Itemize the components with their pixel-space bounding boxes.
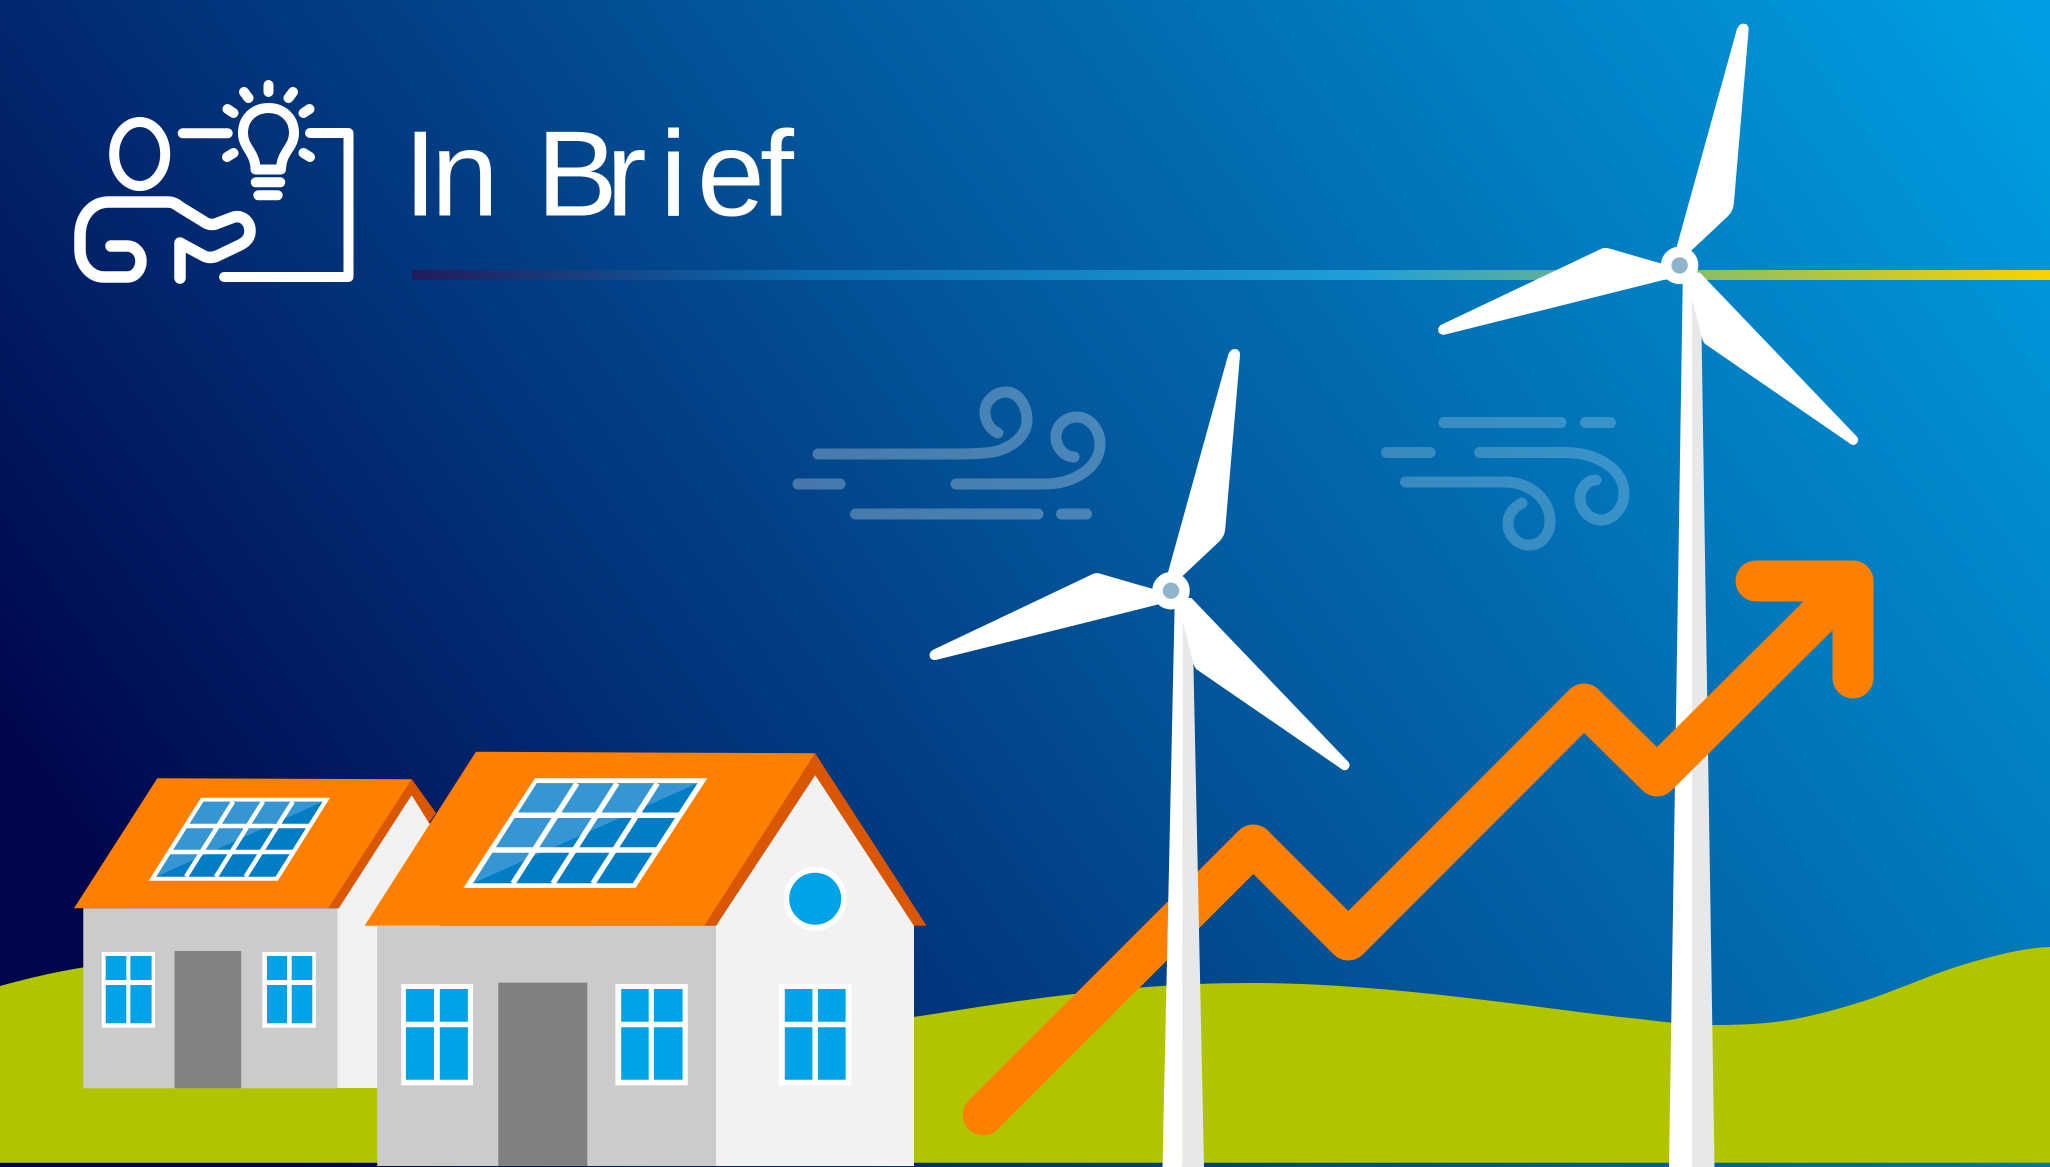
orange growth arrow: [983, 581, 1853, 1115]
left wind turbine: [930, 350, 1349, 1167]
big house left window: [401, 984, 473, 1085]
green hills: [0, 947, 2050, 1163]
right wind turbine: [1439, 24, 1857, 1167]
big house door: [498, 983, 587, 1166]
big house middle window: [615, 984, 688, 1085]
gradient rule under heading: [412, 270, 2050, 280]
title: In Brief: [403, 106, 795, 242]
small house roof edge: [328, 779, 436, 908]
big house: [365, 752, 927, 1166]
small house right window: [262, 952, 316, 1028]
right turbine blades and hub: [1439, 24, 1857, 444]
icon part: body and arm: [80, 202, 250, 278]
icon part: presentation frame: [224, 133, 348, 277]
big house front wall: [377, 926, 716, 1166]
wind swirl left: [798, 392, 1100, 514]
right turbine tower: [1669, 265, 1714, 1167]
big house solar panel: [463, 778, 707, 888]
left turbine tower: [1162, 590, 1204, 1167]
small house roof: [74, 778, 412, 908]
icon part: light rays: [227, 85, 310, 157]
icon part: bulb base: [256, 182, 280, 195]
big house roof: [365, 752, 815, 926]
small house gable wall: [337, 795, 440, 1088]
icon part: line left of bulb: [183, 128, 228, 138]
wind swirl right: [1386, 422, 1624, 545]
icon part: lightbulb: [243, 108, 294, 170]
small house: [74, 778, 440, 1088]
small house solar panel: [149, 798, 330, 881]
icon part: head: [114, 122, 165, 186]
big house roof edge: [704, 753, 927, 926]
big house round window: [784, 867, 847, 931]
small house door: [175, 951, 241, 1088]
big house gable wall: [716, 775, 914, 1166]
small house left window: [102, 952, 155, 1028]
small house front wall: [83, 908, 338, 1088]
icon: person with lightbulb idea: [80, 85, 348, 278]
big house right window: [779, 984, 851, 1085]
left turbine blades and hub: [930, 350, 1349, 770]
